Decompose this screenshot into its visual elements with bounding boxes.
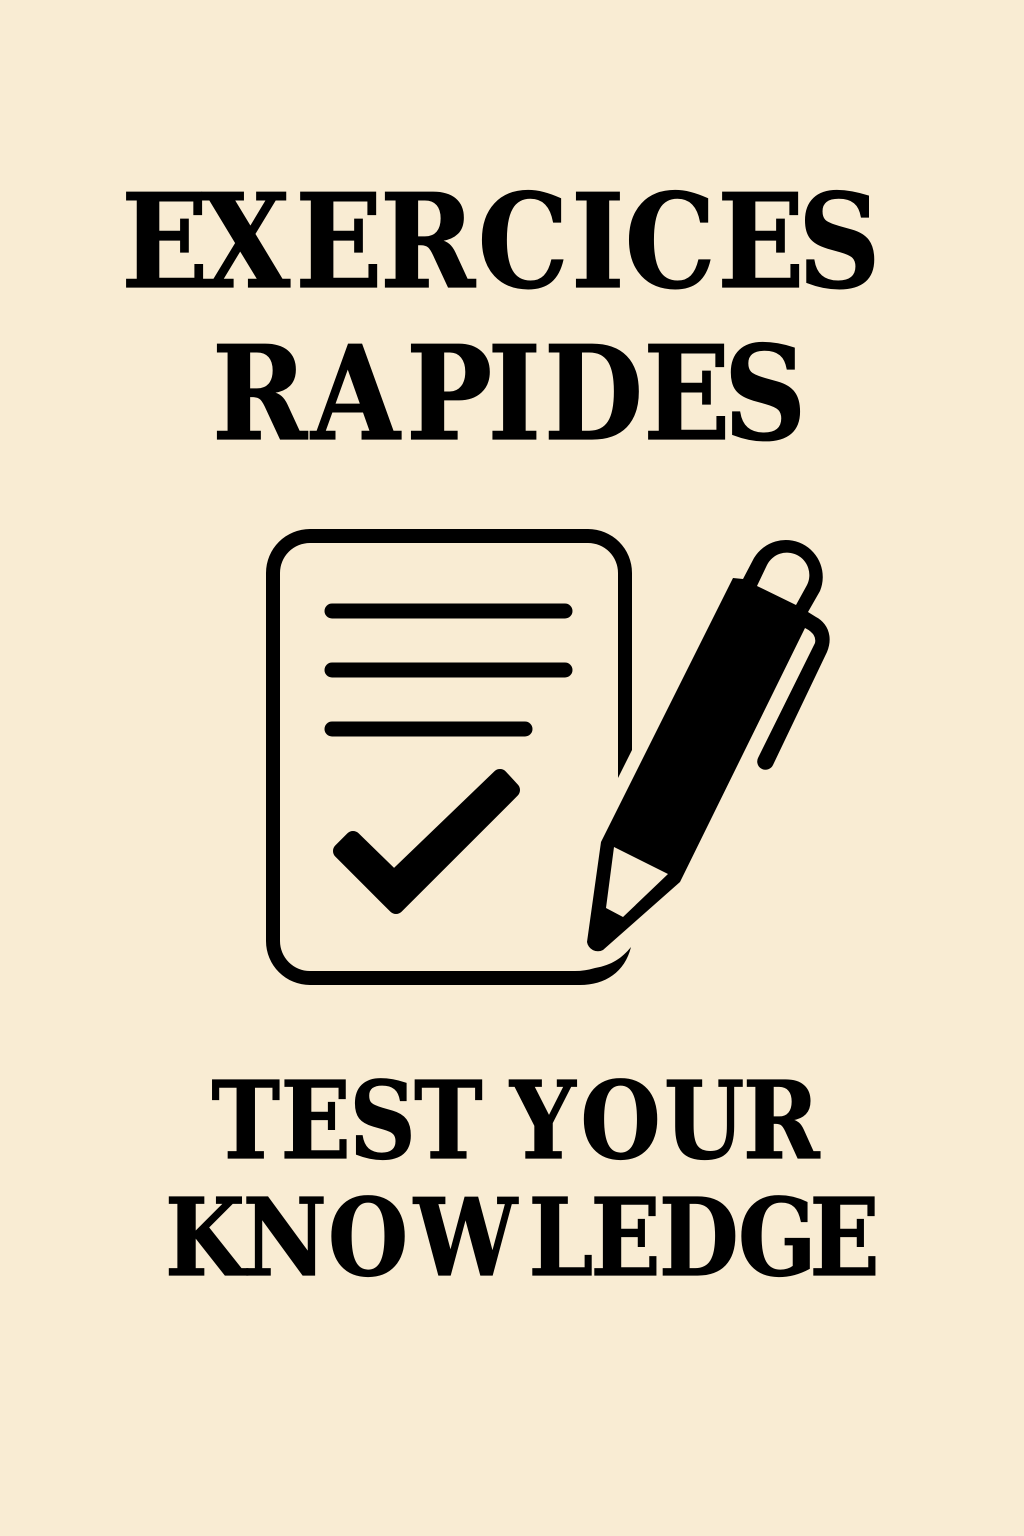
icon: pen [587, 540, 830, 951]
icon: document outline [266, 529, 632, 985]
title: exercices rapides: EXERCICES [121, 165, 881, 318]
title: exercices rapides: RAPIDES [212, 317, 806, 470]
subtitle: test your knowledge [165, 1057, 880, 1301]
icon: document with pen [266, 529, 830, 985]
subtitle: test your knowledge: KNOWLEDGE [165, 1174, 880, 1301]
title: exercices rapides [121, 165, 881, 470]
icon: check mark [341, 777, 512, 906]
subtitle: test your knowledge: TEST YOUR [212, 1057, 820, 1184]
text lines on document [332, 611, 565, 729]
